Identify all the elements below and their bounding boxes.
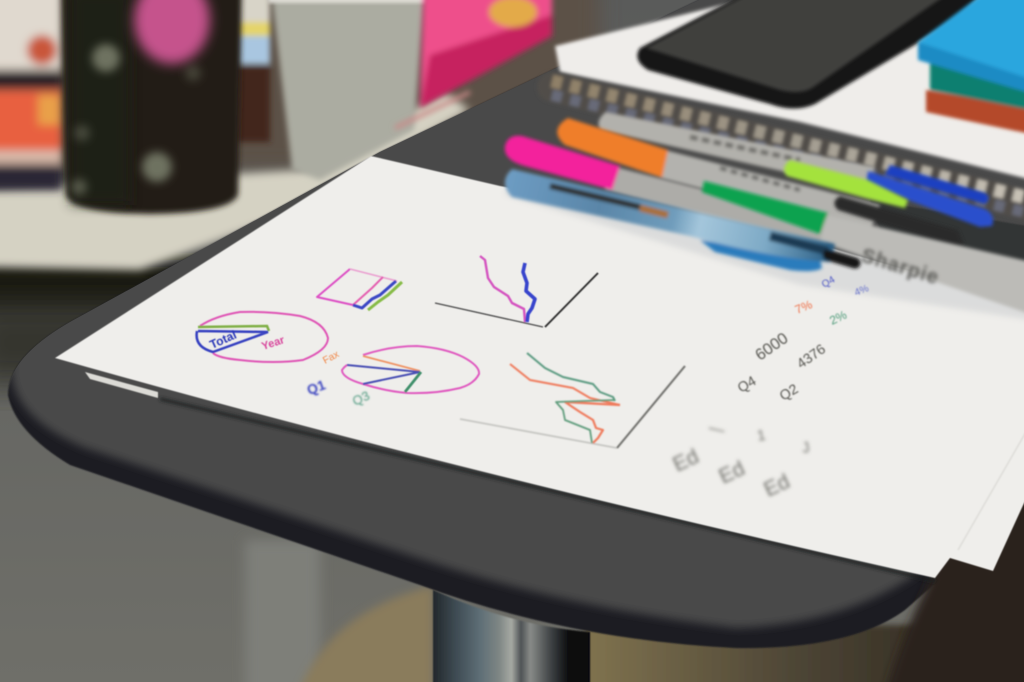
ballpoint pen: [505, 169, 855, 271]
handwritten table figures: Q4: [820, 274, 837, 291]
hand-drawn line chart: orange and green: [460, 353, 685, 448]
handwritten table header and rows: [669, 419, 811, 502]
blurred object: floral cup: [62, 0, 242, 214]
blurred object: box with orange label at left: [0, 0, 62, 190]
blurred object: pink box: [395, 0, 552, 128]
handwritten table figures: 6000: [753, 330, 792, 364]
hand-drawn pie chart: segments: [305, 346, 479, 409]
hand-drawn pie chart: segments: Q1: [305, 376, 328, 398]
pen shadows on paper: [505, 175, 1024, 320]
marker: Sharpie body and green cap: [702, 181, 1024, 320]
white notebook: [555, 0, 1024, 182]
marker: black cap: [834, 196, 964, 246]
hand-drawn pie chart: Total: Year: [260, 334, 287, 353]
blurred object: grey paper cup: [268, 0, 426, 180]
marker: blue caps: [866, 165, 993, 227]
spiral notebook binding: [552, 81, 1024, 216]
blurred object: striped item between cups: [236, 0, 270, 142]
hand-drawn pie chart: segments: Fax: [321, 349, 341, 367]
handwritten table header and rows: Ed: [760, 470, 793, 502]
marker: grey top marker: [598, 112, 875, 190]
handwritten table figures: 7%: [793, 297, 815, 317]
dark table strip below spiral: [870, 200, 1024, 270]
metal pole: [433, 590, 590, 682]
tan stool seat: [296, 586, 433, 682]
hand-drawn bar rectangle: [317, 269, 402, 310]
marker: orange cap marker: [557, 118, 880, 232]
sticky note block: [918, 0, 1024, 136]
main paper sheet: [55, 156, 1024, 581]
handwritten table header and rows: Ed: [669, 445, 702, 477]
handwritten table figures: 2%: [827, 308, 849, 328]
handwritten table figures: 4%: [853, 283, 871, 299]
phone: [637, 0, 985, 108]
handwritten table header and rows: 1: [756, 427, 767, 445]
Sharpie brand text: Sharpie: [859, 245, 942, 289]
olive shadow floor at bottom: [585, 625, 1024, 682]
blurred white counter: [0, 92, 470, 270]
handwritten table figures: Q4: [734, 372, 759, 396]
marker: lime cap: [784, 160, 908, 208]
handwritten table header and rows: J: [801, 439, 811, 457]
handwritten table header and rows: Ed: [715, 457, 748, 489]
hand-drawn pie chart: Total: Total: [208, 328, 239, 352]
hand-drawn line chart: pink and blue: [435, 256, 598, 327]
hand at lower right: [880, 470, 1024, 682]
handwritten table figures: 4376: [794, 340, 828, 371]
handwritten table figures: [734, 274, 871, 404]
hand-drawn pie chart: Total: [197, 312, 328, 362]
handwritten table figures: Q2: [776, 380, 801, 404]
hand-drawn pie chart: segments: Q3: [350, 388, 372, 409]
handwritten table header and rows: —: [707, 419, 727, 439]
marker: pink cap marker: [505, 136, 830, 248]
